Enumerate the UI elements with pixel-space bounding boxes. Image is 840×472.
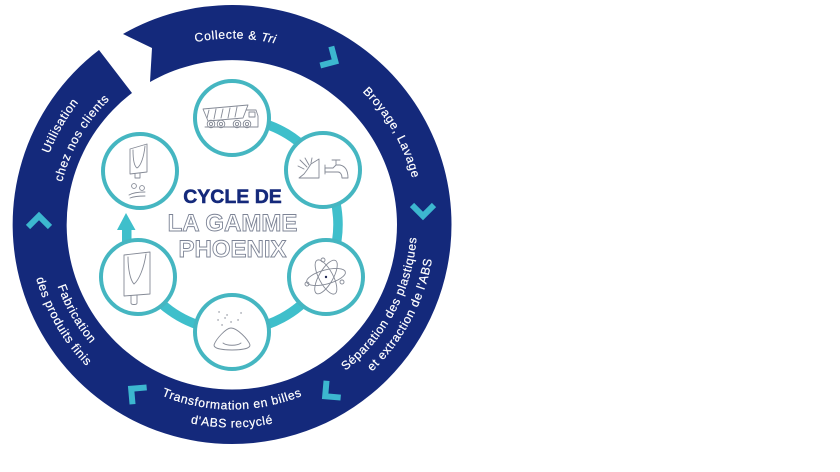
chevron: bottom left [124,380,147,404]
icon: atom [305,257,347,297]
icon: dump truck [203,105,258,128]
icon: dispenser [124,252,150,304]
title line: PHOENIX: PHOENIX [178,236,287,263]
teal connector arc between nodes [128,118,338,331]
node: finished product [101,240,175,314]
label: Séparation, line 1: Séparation des plastiques [342,238,416,370]
circular navy ring with arrow gap [13,5,452,444]
central title [168,186,297,263]
label: Utilisation, line 2: chez nos clients [56,96,108,182]
label: Transformation, line 2: d'ABS recyclé [191,414,272,430]
label: Utilisation, line 1: Utilisation [42,100,78,152]
label: Fabrication, line 1: Fabrication [58,284,94,344]
node: truck [195,81,269,155]
node: use by customers [103,134,177,208]
label: Séparation, line 2: et extraction de l'ABS [368,258,432,370]
node: grinding and washing [286,133,360,207]
node: plastics separation [289,240,363,314]
icon: pile of pellets [214,312,250,350]
chevron: top right [320,46,341,71]
label: Broyage, Lavage: Broyage, Lavage [363,86,418,178]
chevron: right [412,205,434,216]
label: Fabrication, line 2: des produits finis [36,278,90,366]
node: ABS pellets [195,295,269,369]
label: Transformation, line 1: Transformation en billes [164,388,302,410]
chevron: left [28,216,50,227]
title line: CYCLE DE: CYCLE DE [183,186,282,208]
teal chevrons on the ring [28,46,434,405]
icon: dispenser with hand [129,144,147,198]
label: Collecte & Tri: Collecte & Tri [194,30,278,44]
chevron: bottom right [318,381,341,405]
ring step labels [36,30,432,430]
title line: LA GAMME: LA GAMME [168,210,297,237]
icon: crusher and water tap [298,158,348,178]
teal arrow up to usage node [117,213,136,246]
